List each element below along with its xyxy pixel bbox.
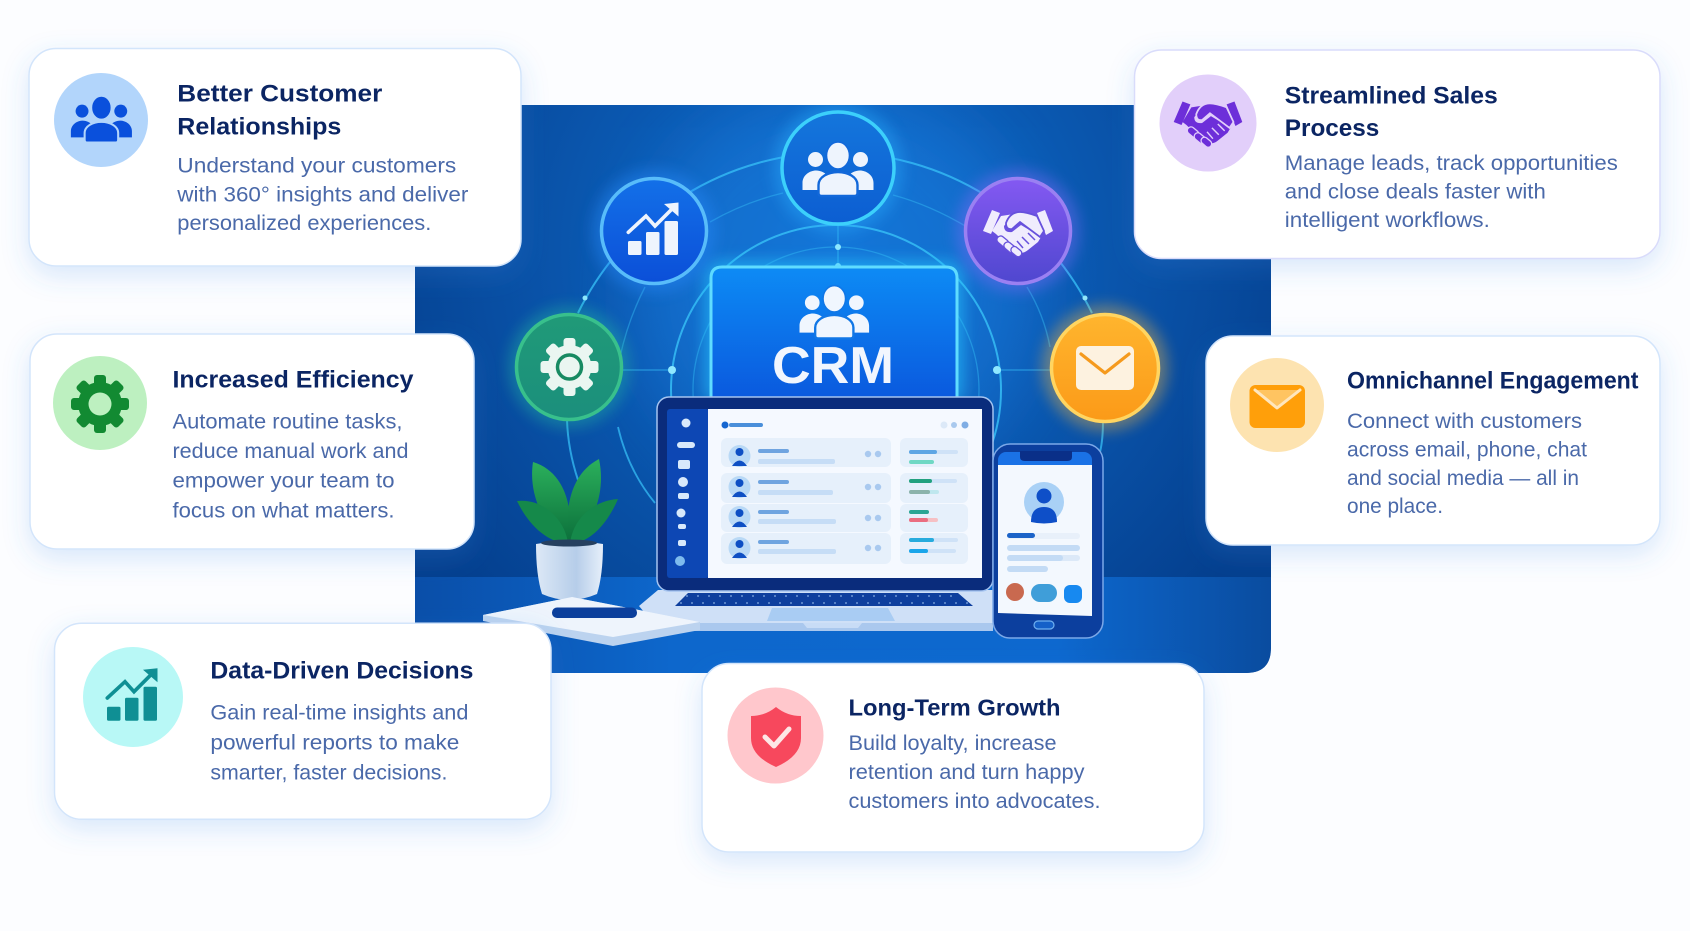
screen bbox=[708, 409, 982, 578]
hub label: CRM bbox=[772, 337, 894, 395]
heading: Relationships bbox=[177, 113, 341, 140]
pot bbox=[536, 541, 603, 600]
description: Build loyalty, increase bbox=[848, 731, 1056, 755]
phone screen bbox=[998, 465, 1092, 616]
description: across email, phone, chat bbox=[1347, 438, 1587, 462]
base bbox=[639, 590, 992, 623]
plant bbox=[517, 459, 618, 600]
heading bbox=[177, 81, 383, 140]
notebook and pen bbox=[483, 597, 700, 646]
icon: shield bbox=[728, 688, 824, 784]
heading: Long-Term Growth bbox=[848, 695, 1060, 721]
description: one place. bbox=[1347, 494, 1443, 518]
orbit icon: customers bbox=[773, 103, 903, 233]
panel backdrop bbox=[415, 105, 1271, 673]
description: personalized experiences. bbox=[177, 211, 431, 235]
glow behind hub bbox=[632, 105, 1040, 422]
orbit nodes bbox=[582, 244, 1088, 374]
icon: handshake bbox=[1160, 74, 1256, 172]
orbit icon: growth chart bbox=[592, 169, 716, 293]
description: retention and turn happy bbox=[848, 760, 1085, 784]
heading: Streamlined Sales bbox=[1285, 82, 1498, 110]
orbit icon: gear bbox=[508, 306, 630, 428]
sidebar bbox=[667, 409, 709, 578]
card: Streamlined Sales Process bbox=[1134, 50, 1660, 258]
status bars bbox=[909, 450, 958, 553]
description: customers into advocates. bbox=[848, 789, 1100, 813]
desk surface bbox=[415, 577, 1271, 673]
card: Better Customer Relationships bbox=[29, 48, 521, 266]
profile bars bbox=[1007, 533, 1080, 539]
heading: Process bbox=[1285, 115, 1379, 142]
description: focus on what matters. bbox=[172, 498, 394, 522]
phone body bbox=[993, 444, 1103, 638]
card: Increased Efficiency bbox=[30, 334, 474, 549]
row avatars bbox=[728, 445, 750, 559]
description bbox=[1285, 151, 1618, 232]
description bbox=[172, 409, 408, 522]
description bbox=[1347, 409, 1587, 518]
heading: Increased Efficiency bbox=[172, 367, 414, 394]
description: reduce manual work and bbox=[172, 439, 408, 463]
row text bars bbox=[758, 449, 881, 554]
heading: Better Customer bbox=[177, 81, 383, 108]
home button bbox=[1034, 621, 1054, 629]
description: empower your team to bbox=[172, 469, 395, 493]
orbit icon: handshake bbox=[956, 169, 1080, 293]
description bbox=[848, 731, 1100, 813]
panel: central CRM illustration bbox=[415, 90, 1271, 673]
description: Connect with customers bbox=[1347, 409, 1582, 433]
trackpad bbox=[767, 608, 895, 621]
card: Omnichannel Engagement bbox=[1206, 336, 1660, 545]
header bars bbox=[722, 422, 728, 428]
hub people icon bbox=[800, 286, 869, 338]
description: smarter, faster decisions. bbox=[210, 760, 447, 784]
notch bbox=[1020, 451, 1072, 461]
keyboard bbox=[675, 593, 973, 606]
card: Data-Driven Decisions bbox=[54, 623, 551, 819]
CRM hub panel bbox=[704, 260, 964, 410]
customer rows bbox=[721, 438, 968, 564]
laptop bbox=[639, 397, 993, 631]
phone action buttons bbox=[1006, 583, 1024, 601]
icon: email bbox=[1230, 358, 1324, 452]
sidebar icons bbox=[675, 418, 695, 566]
description: and close deals faster with bbox=[1285, 180, 1546, 204]
description: Gain real-time insights and bbox=[210, 700, 468, 724]
description: and social media — all in bbox=[1347, 466, 1579, 490]
description: Understand your customers bbox=[177, 154, 456, 178]
heading bbox=[1285, 82, 1498, 142]
leaves bbox=[532, 462, 570, 544]
hub glow bbox=[704, 260, 964, 405]
orbit icon: email bbox=[1042, 305, 1168, 431]
description bbox=[210, 700, 468, 784]
icon: customers bbox=[54, 73, 148, 167]
hub box bbox=[711, 267, 957, 410]
description: powerful reports to make bbox=[210, 730, 459, 754]
lid bbox=[657, 397, 993, 591]
orbit arcs bbox=[567, 152, 1103, 555]
profile avatar bbox=[1024, 482, 1064, 518]
phone bbox=[993, 444, 1103, 638]
description bbox=[176, 154, 468, 235]
description: Automate routine tasks, bbox=[172, 409, 402, 433]
heading: Omnichannel Engagement bbox=[1347, 368, 1638, 394]
description: Manage leads, track opportunities bbox=[1285, 151, 1618, 175]
description: with 360° insights and deliver bbox=[176, 182, 468, 206]
icon: gear bbox=[53, 356, 147, 450]
card: Long-Term Growth bbox=[702, 664, 1204, 852]
description: intelligent workflows. bbox=[1285, 208, 1490, 232]
icon: chart bbox=[83, 647, 183, 747]
heading: Data-Driven Decisions bbox=[210, 657, 473, 684]
